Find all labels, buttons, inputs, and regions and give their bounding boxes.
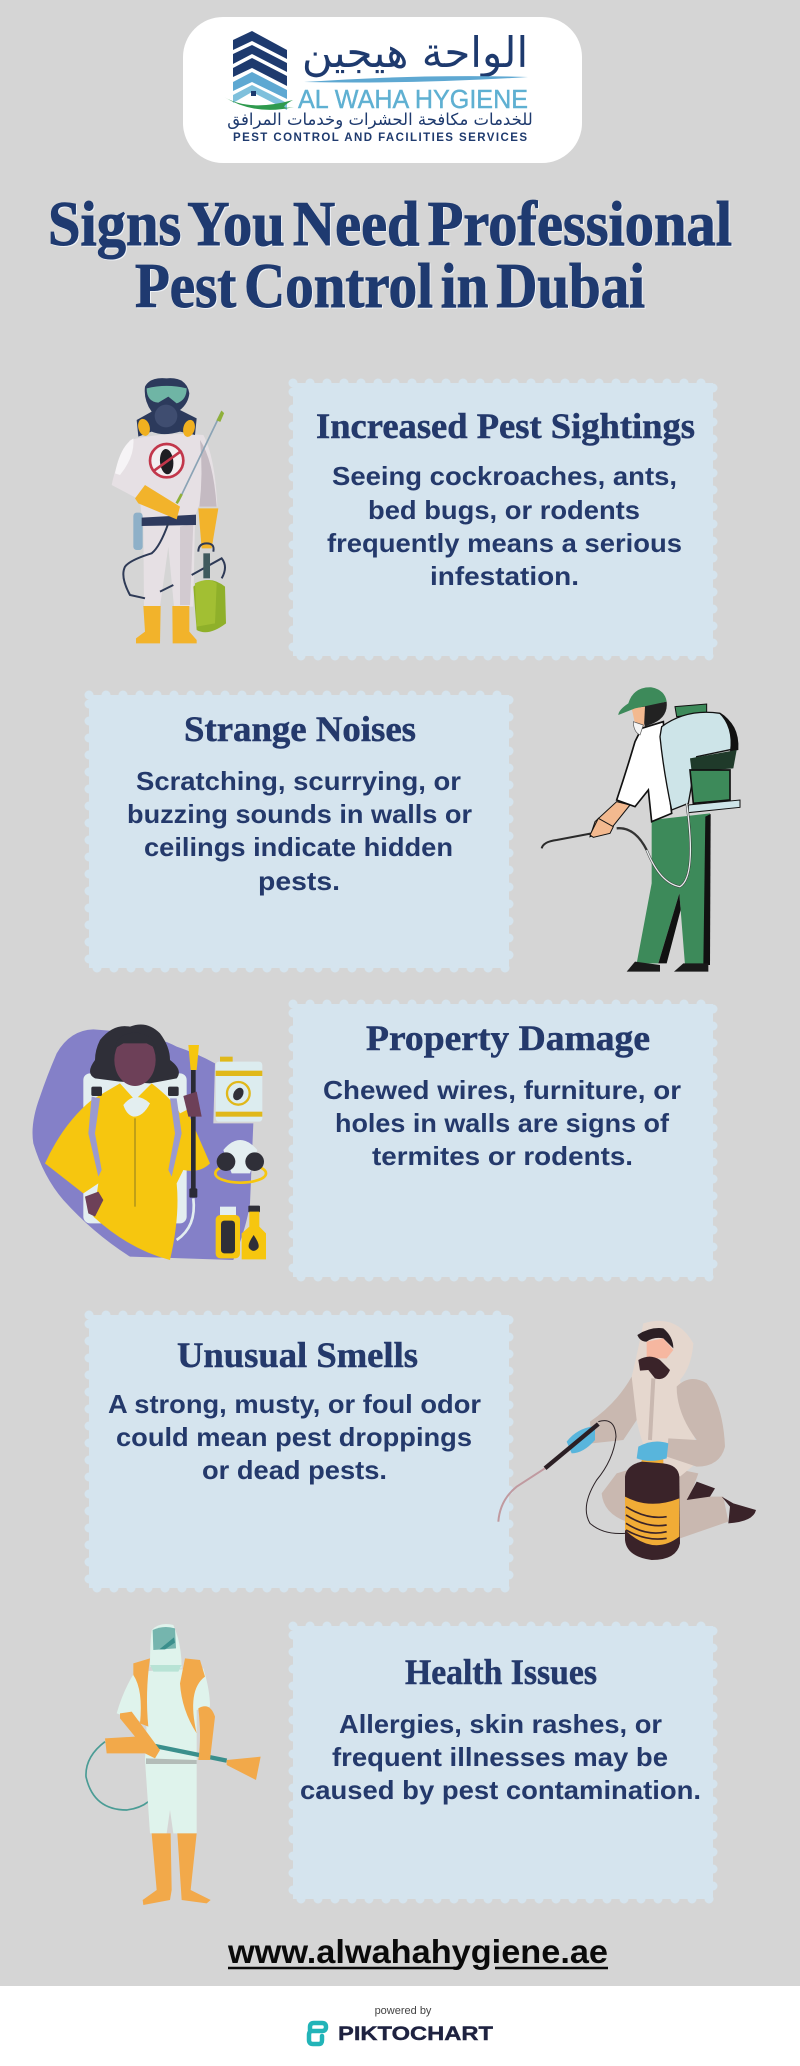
illustration: worker with backpack sprayer	[542, 687, 740, 972]
swoosh	[304, 76, 528, 82]
body text: or dead pests.	[202, 1455, 387, 1485]
body text: Scratching, scurrying, or	[136, 766, 461, 796]
panel: health issues	[293, 1626, 713, 1899]
panel: increased pest sightings	[293, 383, 713, 656]
heading: Unusual Smells	[177, 1335, 418, 1375]
heading: Health Issues	[405, 1652, 597, 1692]
card	[293, 1626, 713, 1899]
body text: caused by pest contamination.	[300, 1775, 701, 1805]
title: Signs You Need Professional	[48, 189, 732, 259]
body text: Chewed wires, furniture, or	[323, 1075, 681, 1105]
piktochart wordmark: PIKTOCHART	[338, 2024, 493, 2045]
footer background	[0, 1986, 800, 2066]
body text: A strong, musty, or foul odor	[108, 1389, 481, 1419]
body text	[127, 766, 472, 896]
body text: holes in walls are signs of	[335, 1108, 669, 1138]
card	[293, 1004, 713, 1277]
body text	[323, 1075, 681, 1171]
body text: frequently means a serious	[327, 528, 682, 558]
card	[89, 1315, 509, 1588]
heading: Property Damage	[366, 1018, 650, 1058]
body text	[327, 461, 682, 591]
body text: Seeing cockroaches, ants,	[332, 461, 677, 491]
website link: www.alwahahygiene.ae	[227, 1933, 608, 1970]
card	[293, 383, 713, 656]
body text: frequent illnesses may be	[332, 1742, 668, 1772]
body text	[300, 1709, 701, 1805]
illustration: worker in hazmat suit	[86, 1624, 261, 1905]
brand name: AL WAHA HYGIENE	[298, 84, 528, 114]
panel: strange noises	[89, 695, 509, 968]
body text	[108, 1389, 481, 1485]
body text: bed bugs, or rodents	[368, 495, 640, 525]
title	[48, 189, 732, 321]
illustration: worker with gas mask	[112, 378, 226, 643]
body text: could mean pest droppings	[116, 1422, 472, 1452]
illustration: kneeling worker with sprayer	[498, 1321, 756, 1560]
icon: building	[224, 31, 294, 110]
arabic name: الواحة هيجين	[302, 28, 528, 77]
heading: Increased Pest Sightings	[316, 406, 695, 446]
body text: termites or rodents.	[372, 1141, 633, 1171]
icon: piktochart logo	[309, 2023, 326, 2044]
footer	[0, 1986, 800, 2066]
body text: ceilings indicate hidden	[144, 832, 453, 862]
panel: unusual smells	[89, 1315, 509, 1588]
tagline: PEST CONTROL AND FACILITIES SERVICES	[233, 132, 527, 144]
body text: Allergies, skin rashes, or	[339, 1709, 662, 1739]
body text: buzzing sounds in walls or	[127, 799, 472, 829]
panel: property damage	[293, 1004, 713, 1277]
logo background	[183, 17, 582, 163]
logo panel	[183, 17, 582, 163]
card	[89, 695, 509, 968]
illustration: worker in yellow suit	[32, 1024, 266, 1260]
body text: pests.	[258, 866, 340, 896]
arabic tagline: للخدمات مكافحة الحشرات وخدمات المرافق	[227, 110, 533, 130]
powered by text: powered by	[375, 2005, 432, 2017]
title: Pest Control in Dubai	[135, 251, 645, 321]
body text: infestation.	[430, 561, 579, 591]
heading: Strange Noises	[184, 709, 416, 749]
